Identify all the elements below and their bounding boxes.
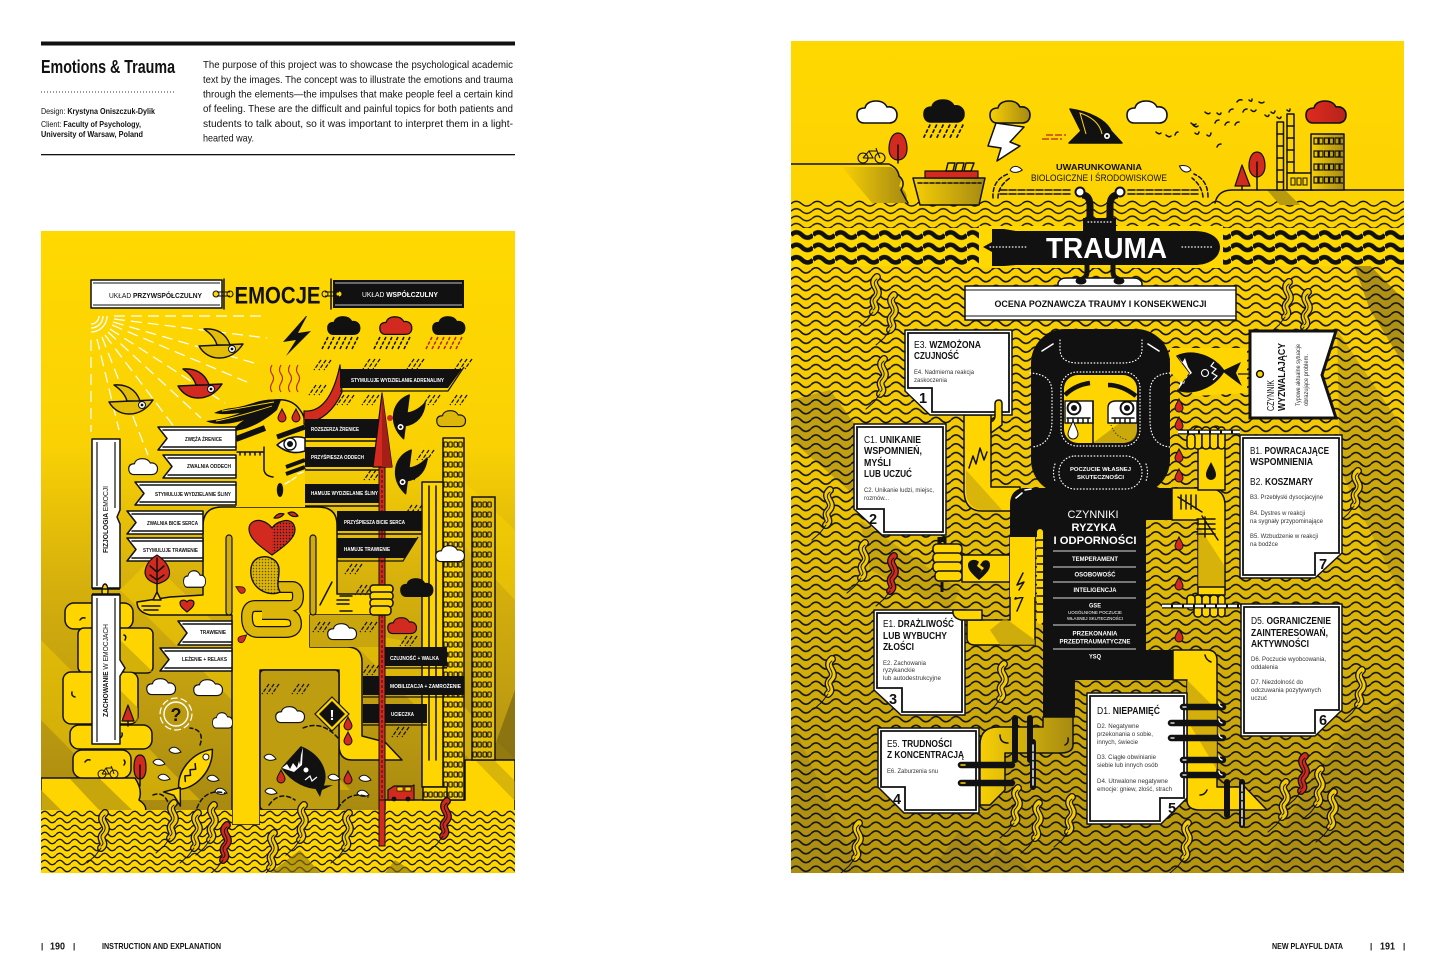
ground left [41, 778, 146, 812]
face [1064, 375, 1137, 443]
note 5: niepamięć: przekonania o sobie, [1097, 731, 1153, 738]
water drops and dashed arcs [993, 165, 1208, 198]
footer left: INSTRUCTION AND EXPLANATION [102, 942, 221, 951]
title: Emotions & Trauma [41, 57, 176, 77]
mustard block under right arm [310, 615, 379, 647]
label: czynniki ryzyka i odporności [1054, 509, 1136, 547]
risk factor list [1053, 551, 1136, 660]
footer right: | [1403, 942, 1405, 951]
footer right: NEW PLAYFUL DATA [1272, 942, 1343, 951]
question mark sign: ? [170, 705, 182, 725]
ropes binding the left leg [961, 718, 1033, 787]
warning diamond: ! [330, 707, 334, 724]
risk factor list: PRZEKONANIA [1072, 632, 1118, 638]
spear bottom over sea [379, 800, 385, 846]
banner: czynnik wyzwalający: Typowe aktualne sytuacje [1295, 344, 1302, 406]
upper left arm [964, 415, 1020, 511]
ship [913, 163, 985, 205]
footer left: | [73, 942, 75, 951]
risk factor list: WŁASNEJ SKUTECZNOŚCI [1067, 614, 1123, 621]
leg strip detail [1010, 529, 1043, 624]
stomach and intestines [234, 557, 298, 644]
dotted divider under title [41, 91, 176, 93]
note 5: niepamięć: 5 [1168, 801, 1176, 817]
note 4: trudności z koncentracją: Z KONCENTRACJĄ [887, 750, 964, 761]
spear [373, 393, 393, 846]
note 1: wzmożona czujność: E3. WZMOŻONA [914, 340, 981, 351]
poster background [791, 41, 1404, 873]
label: poczucie własnej skuteczności [1054, 456, 1148, 489]
right shore [1215, 190, 1404, 205]
black banners: upper sympathetic effects: STYMULUJE WYDZIELANIE ADRENALINY [351, 378, 444, 384]
hand holding spear [320, 582, 393, 615]
sun rays [91, 316, 267, 455]
dashes left of bird [1042, 135, 1066, 139]
seaweed [812, 277, 1363, 873]
note 2: unikanie: rozmów... [864, 495, 889, 502]
thick waves right [1223, 229, 1404, 266]
note 1: wzmożona czujność [905, 330, 1012, 415]
sky clouds [857, 100, 1346, 123]
head with diving hood [1016, 329, 1170, 498]
banner: czynnik wyzwalający: obrazujące problem. [1303, 354, 1310, 406]
broken heart [968, 560, 990, 580]
red trees [122, 705, 146, 786]
column: zachowanie w emocjach: ZACHOWANIE W EMOCJACH [101, 624, 110, 717]
halo behind submarine [979, 226, 1223, 268]
diagonal light streaks [41, 506, 515, 800]
banner: czynnik wyzwalający [1250, 331, 1336, 418]
left leg upper [967, 537, 1035, 645]
label: poczucie własnej skuteczności: SKUTECZNOŚCI [1077, 474, 1124, 481]
intro paragraph [203, 60, 513, 144]
note 7: powracające wspomnienia [1240, 435, 1342, 578]
risk factor list: PRZEDTRAUMATYCZNE [1060, 640, 1130, 646]
diagonal shadows beneath the waves [791, 240, 1404, 873]
risk factor list: OSOBOWOŚĆ [1074, 570, 1116, 578]
pointing finger over note 1 [991, 400, 1002, 433]
rain [924, 124, 963, 138]
lower black banners: MOBILIZACJA + ZAMROŻENIE [390, 683, 461, 690]
heading box: układ współczulny [322, 279, 464, 309]
note 4: trudności z koncentracją [878, 728, 979, 813]
risk factor list: TEMPERAMENT [1072, 557, 1118, 563]
risk factor list: INTELIGENCJA [1074, 588, 1117, 594]
red car [388, 785, 414, 801]
white banners: parasympathetic effects: ZWALNIA BICIE SERCA [147, 521, 198, 527]
note 7: powracające wspomnienia: WSPOMNIENIA [1250, 457, 1313, 468]
question mark sign [160, 698, 192, 730]
building: striped block [422, 482, 447, 800]
box: ocena poznawcza [965, 286, 1236, 320]
sea waves [41, 810, 515, 873]
head outline [275, 400, 305, 425]
lower black banners: UCIECZKA [391, 712, 414, 718]
note 3: drażliwość: ryzykanckie [883, 667, 915, 674]
note 3: drażliwość: E1. DRAŻLIWOŚĆ [883, 618, 954, 630]
red tree [889, 133, 907, 163]
note 7: powracające wspomnienia: B4. Dystres w reakcji [1250, 510, 1305, 517]
white banners: parasympathetic effects: STYMULUJE WYDZIELANIE ŚLINY [155, 491, 231, 498]
black banners in front of the spear [337, 511, 422, 561]
poster background [41, 231, 515, 873]
factory buildings [1287, 134, 1344, 190]
footer right: 191 [1380, 942, 1395, 952]
white banners: parasympathetic effects [127, 427, 236, 671]
risk factor list: UOGÓLNIONE POCZUCIE [1068, 609, 1122, 615]
building: low tower [472, 497, 495, 760]
footer left [41, 942, 221, 952]
face details [236, 409, 305, 497]
heading box: układ współczulny: UKŁAD WSPÓŁCZULNY [362, 290, 438, 299]
note 5: niepamięć: D2. Negatywne [1097, 723, 1139, 730]
right leg and foot [1173, 650, 1267, 810]
note 7: powracające wspomnienia: B5. Wzbudzenie w reakcji [1250, 533, 1318, 540]
note 3: drażliwość [874, 610, 965, 715]
white banners: parasympathetic effects: ZWALNIA ODDECH [187, 464, 231, 470]
note 7: powracające wspomnienia: 7 [1319, 557, 1327, 573]
panel: TRAUMA poster [791, 41, 1404, 873]
note 2: unikanie: C2. Unikanie ludzi, miejsc, [864, 487, 934, 494]
intro paragraph: of feeling. These are the difficult and painful topics for both patients and [203, 104, 513, 115]
black banners in front of the spear: HAMUJE TRAWIENIE [344, 547, 390, 553]
risk factor list: GSE [1089, 604, 1101, 610]
note 1: wzmożona czujność: CZUJNOŚĆ [914, 350, 959, 362]
note 3: drażliwość: E2. Zachowania [883, 660, 926, 667]
heading: uwarunkowania: UWARUNKOWANIA [1056, 163, 1142, 172]
red blood drops [1175, 399, 1183, 642]
note 6: ograniczenie zainteresowań: D6. Poczucie wyobcowania, [1251, 656, 1326, 663]
intro paragraph: The purpose of this project was to showcase the psychological academic [203, 60, 513, 71]
note 6: ograniczenie zainteresowań: odczuwania pozytywnych [1251, 687, 1321, 694]
note 3: drażliwość: ZŁOŚCI [883, 641, 914, 653]
banner: czynnik wyzwalający: CZYNNIK [1266, 380, 1277, 411]
note 5: niepamięć: D1. NIEPAMIĘĆ [1097, 705, 1160, 717]
note 6: ograniczenie zainteresowań: D7. Niezdolność do [1251, 679, 1303, 686]
note 1: wzmożona czujność: 1 [919, 391, 927, 407]
header: bottom rule [41, 154, 515, 155]
note 5: niepamięć: emocje: gniew, złość, strach [1097, 786, 1172, 793]
birds [109, 329, 428, 496]
leaf tree held in hand [142, 555, 170, 610]
thick waves right pattern [1223, 229, 1404, 266]
label: czynniki ryzyka i odporności: CZYNNIKI [1068, 509, 1118, 521]
footer right: | [1370, 942, 1372, 951]
black banners: upper sympathetic effects: HAMUJE WYDZIELANIE ŚLINY [311, 490, 378, 497]
risk factor list: YSQ [1089, 654, 1101, 660]
warning diamond [315, 697, 349, 731]
note 7: powracające wspomnienia: na bodźce [1250, 541, 1278, 548]
trigger fish [1170, 348, 1258, 396]
bushes [63, 603, 153, 778]
body: torso, arms and legs [137, 507, 402, 825]
head [236, 455, 305, 507]
note 2: unikanie: 2 [869, 512, 877, 528]
note 7: powracające wspomnienia: na sygnały przypominające [1250, 518, 1323, 525]
left shore [791, 164, 908, 203]
heading box: układ przywspółczulny: UKŁAD PRZYWSPÓŁCZULNY [109, 291, 202, 300]
lightning bolt [283, 316, 311, 356]
factory chimneys [1277, 114, 1294, 190]
left leg lower and foot [980, 717, 1073, 805]
white banners: parasympathetic effects: LEŻENIE + RELAKS [182, 656, 227, 663]
black banners: upper sympathetic effects: ROZSZERZA ŹRENICE [311, 425, 359, 433]
intro paragraph: text by the images. The concept was to illustrate the emotions and trauma [203, 75, 513, 86]
black bird [1069, 109, 1122, 143]
slanted dash marks [262, 359, 472, 737]
footer left: | [41, 942, 43, 951]
note 3: drażliwość: 3 [889, 692, 897, 708]
note 5: niepamięć: D4. Utrwalone negatywne [1097, 778, 1168, 785]
note 6: ograniczenie zainteresowań: 6 [1319, 713, 1327, 729]
note 7: powracające wspomnienia: B2. KOSZMARY [1250, 477, 1313, 488]
box: ocena poznawcza: OCENA POZNAWCZA TRAUMY I KONSEKWENCJI [994, 299, 1206, 309]
submarine [983, 188, 1220, 287]
footer left: 190 [50, 942, 65, 952]
water and blood drops [153, 717, 371, 796]
arm slots [226, 535, 316, 615]
credits: Design: Krystyna Oniszczuk-Dylik [41, 107, 155, 116]
column: fizjologia emocji [92, 439, 120, 588]
piranha [282, 747, 333, 797]
label: czynniki ryzyka i odporności: RYZYKA [1072, 522, 1117, 534]
thick waves left [791, 229, 979, 266]
intro paragraph: students to talk about, so it was important to interpret them in a light- [203, 119, 513, 130]
note 4: trudności z koncentracją: 4 [893, 792, 901, 808]
note 7: powracające wspomnienia: B3. Przebłyski dysocjacyjne [1250, 494, 1323, 501]
heading: uwarunkowania [1031, 163, 1167, 183]
black banners: upper sympathetic effects: PRZYŚPIESZA ODDECH [311, 454, 364, 461]
note 5: niepamięć [1087, 693, 1187, 824]
note 6: ograniczenie zainteresowań: oddalenia [1251, 664, 1278, 671]
note 1: wzmożona czujność: E4. Nadmierna reakcja [914, 369, 974, 376]
column: zachowanie w emocjach [92, 595, 125, 744]
note 6: ograniczenie zainteresowań [1241, 604, 1342, 736]
heart [249, 512, 298, 555]
column: fizjologia emocji: FIZJOLOGIA EMOCJI [101, 486, 110, 553]
credits: University of Warsaw, Poland [41, 130, 143, 139]
horn [304, 365, 342, 424]
banner: czynnik wyzwalający: WYZWALAJĄCY [1277, 343, 1288, 411]
note 5: niepamięć: D3. Ciągłe obwinianie [1097, 754, 1156, 761]
credits: Client: Faculty of Psychology, [41, 120, 141, 129]
bicycle [858, 148, 885, 163]
note 4: trudności z koncentracją: E5. TRUDNOŚCI [887, 738, 952, 750]
clouds [129, 411, 466, 728]
note 6: ograniczenie zainteresowań: ZAINTERESOWAŃ, [1251, 627, 1328, 639]
black banners: upper sympathetic effects [305, 367, 464, 506]
black banners in front of the spear: PRZYŚPIESZA BICIE SERCA [344, 519, 405, 526]
label: poczucie własnej skuteczności: POCZUCIE WŁASNEJ [1070, 467, 1131, 473]
white banners: parasympathetic effects: ZWĘŻA ŹRENICE [185, 435, 222, 443]
note 2: unikanie: MYŚLI [864, 457, 891, 469]
note 1: wzmożona czujność: zaskoczenia [914, 377, 947, 384]
right arm [1162, 427, 1240, 617]
finger pointing at note 3 [953, 610, 982, 620]
body: black torso [1010, 488, 1173, 717]
credits [41, 107, 155, 139]
ground right [385, 760, 515, 812]
dark corner shadow [495, 690, 515, 760]
note 3: drażliwość: lub autodestrukcyjne [883, 675, 941, 682]
heading: TRAUMA: TRAUMA [1046, 233, 1167, 265]
note 6: ograniczenie zainteresowań: uczuć [1251, 695, 1268, 702]
note 4: trudności z koncentracją: E6. Zaburzenia snu [887, 768, 938, 775]
intro paragraph: hearted way. [203, 134, 254, 144]
note 6: ograniczenie zainteresowań: AKTYWNOŚCI [1251, 638, 1309, 650]
note 2: unikanie: WSPOMNIEŃ, [864, 445, 922, 457]
panel: EMOCJE poster [41, 231, 515, 883]
thick waves left pattern [791, 229, 979, 266]
note 5: niepamięć: innych, świecie [1097, 739, 1138, 746]
heat waves [270, 365, 300, 392]
dashed arcs [153, 726, 368, 808]
heading: uwarunkowania: BIOLOGICZNE I ŚRODOWISKOWE [1031, 172, 1167, 183]
footer right [1272, 942, 1405, 952]
note 7: powracające wspomnienia: B1. POWRACAJĄCE [1250, 446, 1329, 457]
heading: EMOCJE: EMOCJE [234, 282, 320, 310]
small red heart [180, 600, 194, 612]
wave field [791, 200, 1404, 873]
lower black banners: CZUJNOŚĆ + WALKA [390, 654, 439, 662]
lightning bolt [988, 123, 1024, 161]
note 3: drażliwość: LUB WYBUCHY [883, 631, 947, 642]
inner mustard panel between the legs [260, 670, 339, 810]
heading box: układ przywspółczulny [91, 279, 233, 309]
hair [206, 399, 281, 431]
yellow fish [163, 743, 222, 806]
small trees right [1235, 152, 1265, 190]
note 5: niepamięć: siebie lub innych osób [1097, 762, 1158, 769]
lower left arm [933, 537, 1010, 592]
note 6: ograniczenie zainteresowań: D5. OGRANICZENIE [1251, 616, 1331, 627]
white banners: parasympathetic effects: STYMULUJE TRAWIENIE [143, 548, 198, 554]
header: top rule [41, 42, 515, 46]
white banners: parasympathetic effects: TRAWIENIE [200, 630, 226, 636]
lower black banners [363, 647, 464, 725]
bicycle [98, 766, 118, 778]
note 2: unikanie [854, 424, 946, 535]
ropes binding the right leg [1171, 703, 1242, 825]
note 2: unikanie: LUB UCZUĆ [864, 468, 912, 480]
seaweed [87, 801, 448, 883]
note 2: unikanie: C1. UNIKANIE [864, 435, 921, 446]
smoke [1156, 99, 1290, 147]
storm clouds with rain [322, 317, 465, 349]
building: tall tower [443, 438, 464, 800]
label: czynniki ryzyka i odporności: I ODPORNOŚCI [1054, 534, 1136, 547]
intro paragraph: through the elements—the impulses that make people feel a certain kind [203, 90, 513, 100]
connector ring [92, 583, 120, 594]
